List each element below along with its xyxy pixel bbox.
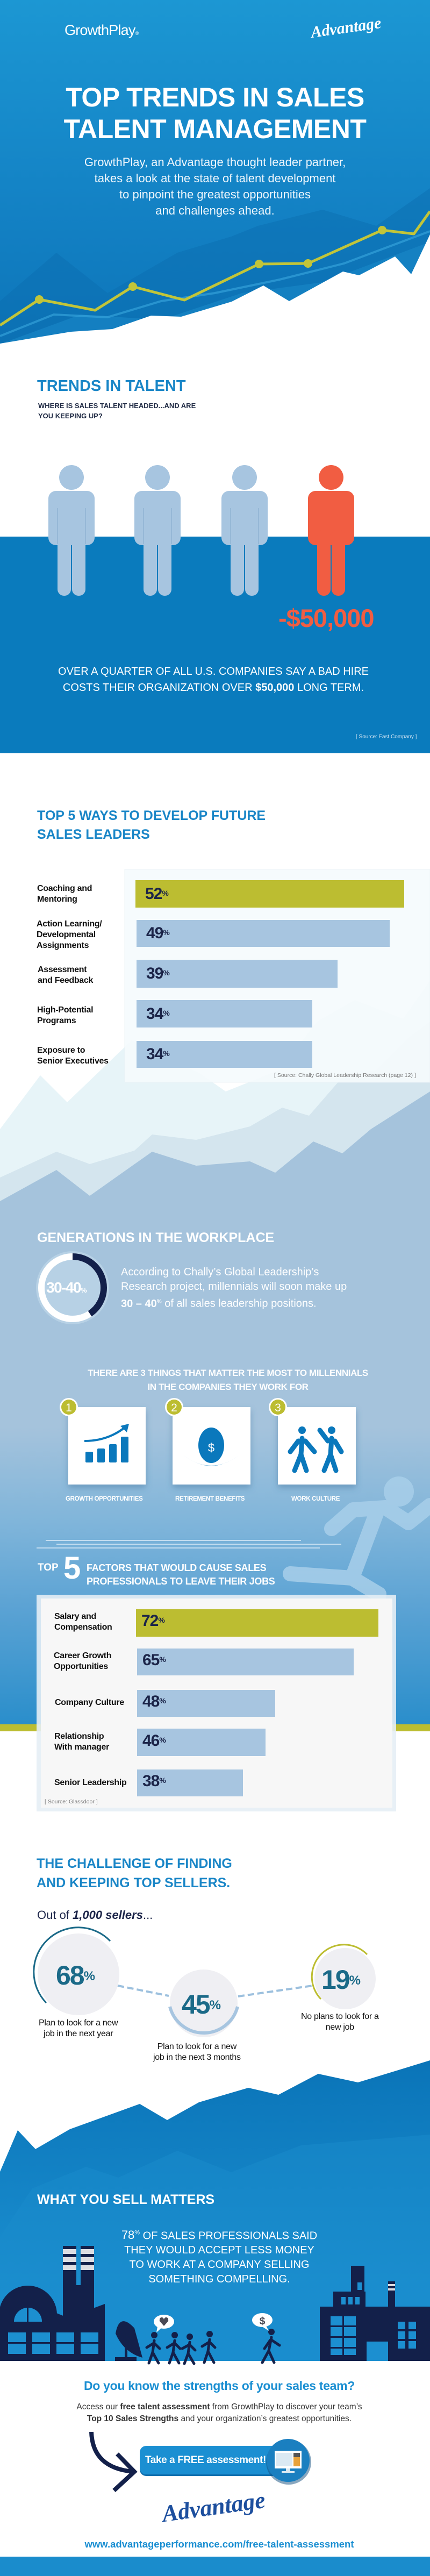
icon: two people bbox=[290, 1426, 341, 1471]
speed lines bbox=[37, 1540, 341, 1548]
captions: new job bbox=[326, 2023, 354, 2032]
walking people bbox=[147, 2329, 280, 2364]
heading: generations: GENERATIONS IN THE WORKPLACE bbox=[37, 1230, 274, 1245]
heading: top 5 ways: SALES LEADERS bbox=[37, 827, 150, 842]
hero white mountain edge bbox=[0, 234, 430, 376]
icon: runner bbox=[290, 1476, 430, 1645]
bar labels: develop: Exposure to bbox=[37, 1046, 85, 1055]
heading: 3 things: THERE ARE 3 THINGS THAT MATTER THE MOST TO MILLENNIALS bbox=[88, 1368, 368, 1378]
bar labels: develop: Action Learning/ bbox=[37, 919, 102, 929]
olive stripe bbox=[0, 1724, 430, 1731]
source: fast company: [ Source: Fast Company ] bbox=[356, 734, 417, 740]
logo: GrowthPlay: GrowthPlay® bbox=[64, 22, 138, 38]
box labels bbox=[66, 1496, 340, 1502]
trends blue band bbox=[0, 537, 430, 753]
cityscape bbox=[0, 2246, 430, 2361]
speech bubbles: $ bbox=[260, 2316, 266, 2327]
bar values: develop: 49% bbox=[146, 924, 170, 942]
bar labels: develop: Mentoring bbox=[37, 895, 77, 904]
heading: top 5 factors: 5 bbox=[63, 1551, 81, 1586]
bar labels: develop: Coaching and bbox=[37, 884, 92, 893]
box labels: WORK CULTURE bbox=[291, 1496, 340, 1502]
chart panel: develop leaders bbox=[125, 869, 430, 1082]
people icons bbox=[48, 465, 354, 596]
captions: Plan to look for a new bbox=[157, 2042, 236, 2051]
bar labels: develop: Senior Executives bbox=[37, 1057, 109, 1066]
source: glassdoor: [ Source: Glassdoor ] bbox=[45, 1799, 98, 1805]
cta text: Top 10 Sales Strengths and your organization’s greatest opportunities. bbox=[87, 2414, 352, 2423]
heading: 3 things bbox=[88, 1368, 368, 1392]
heading: what you sell matters: WHAT YOU SELL MATTERS bbox=[37, 2192, 214, 2207]
bottom blue mountains bbox=[0, 2060, 430, 2361]
bar labels: factors: Company Culture bbox=[55, 1698, 124, 1707]
bar values: factors: 46% bbox=[142, 1732, 166, 1750]
bar labels: develop: Developmental bbox=[37, 930, 96, 939]
icon: growth chart bbox=[84, 1424, 129, 1462]
number badges: 2 bbox=[171, 1402, 177, 1414]
heading: challenge: THE CHALLENGE OF FINDING bbox=[37, 1856, 232, 1871]
heading: top 5 factors: PROFESSIONALS TO LEAVE THEIR JOBS bbox=[87, 1576, 275, 1587]
captions: Plan to look for a new bbox=[39, 2018, 118, 2028]
box labels: GROWTH OPPORTUNITIES bbox=[66, 1496, 143, 1502]
captions: job in the next 3 months bbox=[153, 2053, 241, 2062]
logo: Advantage: Advantage bbox=[310, 14, 382, 41]
subtitle: and challenges ahead. bbox=[155, 204, 275, 217]
heading: challenge bbox=[37, 1856, 232, 1890]
captions: job in the next year bbox=[44, 2029, 113, 2038]
subtitle: to pinpoint the greatest opportunities bbox=[119, 188, 311, 201]
bar labels: factors: Career Growth bbox=[54, 1651, 111, 1660]
icon: nest egg bbox=[184, 1428, 239, 1466]
bar labels: develop: Assessment bbox=[38, 965, 87, 974]
text: bad hire stat: OVER A QUARTER OF ALL U.S. COMPANIES SAY A BAD HIRE bbox=[58, 666, 369, 677]
bar values: factors: 65% bbox=[142, 1651, 166, 1669]
bar labels: factors: With manager bbox=[54, 1743, 109, 1752]
chart panel: leave factors bbox=[37, 1595, 396, 1811]
bar labels: develop: and Feedback bbox=[38, 976, 93, 985]
bar labels: develop: Programs bbox=[37, 1016, 76, 1025]
hero background bbox=[0, 0, 430, 355]
stat 68%: 68% bbox=[56, 1960, 95, 1990]
cta text: Access our free talent assessment from GrowthPlay to discover your team’s bbox=[76, 2402, 362, 2411]
text: 78% bbox=[121, 2228, 317, 2285]
bar values: factors: 72% bbox=[141, 1612, 165, 1630]
text: out of 1,000: Out of 1,000 sellers... bbox=[37, 1908, 153, 1922]
bar values: factors: 38% bbox=[142, 1772, 166, 1790]
text: 78%: SOMETHING COMPELLING. bbox=[148, 2273, 290, 2285]
heading: top 5 factors: FACTORS THAT WOULD CAUSE SALES bbox=[87, 1562, 266, 1573]
bar values: develop bbox=[145, 885, 170, 1063]
cta text bbox=[76, 2402, 362, 2423]
subheading bbox=[38, 402, 196, 420]
hero chart line bbox=[0, 211, 430, 325]
millennials boxes bbox=[60, 1398, 356, 1485]
bar labels: develop: Assignments bbox=[37, 941, 89, 950]
title bbox=[64, 82, 367, 144]
bar values: develop: 34% bbox=[146, 1005, 170, 1023]
logo: Advantage footer: Advantage bbox=[161, 2487, 267, 2527]
subtitle bbox=[84, 155, 346, 217]
text: bad hire stat: COSTS THEIR ORGANIZATION OVER $50,000 LONG TERM. bbox=[63, 682, 364, 694]
light mountains background bbox=[0, 981, 430, 1724]
text: 78%: 78% OF SALES PROFESSIONALS SAID bbox=[121, 2228, 317, 2242]
bar labels: factors: Opportunities bbox=[54, 1662, 108, 1671]
cta heading: Do you know the strengths of your sales team? bbox=[84, 2379, 355, 2393]
captions bbox=[39, 2012, 379, 2062]
heading: top 5 ways bbox=[37, 808, 266, 842]
bar labels: factors: Relationship bbox=[54, 1732, 104, 1741]
number badges: 3 bbox=[275, 1402, 281, 1414]
bar values: factors bbox=[141, 1612, 166, 1790]
title: TOP TRENDS IN SALES bbox=[66, 82, 364, 112]
subheading: WHERE IS SALES TALENT HEADED...AND ARE bbox=[38, 402, 196, 410]
bar labels: factors: Senior Leadership bbox=[54, 1778, 127, 1787]
subtitle: GrowthPlay, an Advantage thought leader partner, bbox=[84, 155, 346, 169]
text: millennials leadership bbox=[121, 1266, 347, 1310]
donut label: 30-40% bbox=[46, 1279, 87, 1296]
source: chally: [ Source: Chally Global Leadership Research (page 12) ] bbox=[274, 1072, 416, 1079]
text: millennials leadership: 30 – 40% of all sales leadership positions. bbox=[121, 1298, 317, 1310]
captions: No plans to look for a bbox=[301, 2012, 379, 2021]
footer band bbox=[0, 2557, 430, 2576]
bar labels: develop bbox=[37, 884, 109, 1066]
bar labels: factors bbox=[54, 1612, 127, 1787]
button text: Take a FREE assessment! bbox=[145, 2454, 266, 2466]
stat 19%: 19% bbox=[321, 1965, 361, 1995]
arrow bbox=[91, 2432, 134, 2491]
seller circles bbox=[34, 1928, 376, 2037]
speech bubbles bbox=[154, 2313, 273, 2332]
bar labels: factors: Compensation bbox=[54, 1623, 112, 1632]
bar values: develop: 39% bbox=[146, 965, 170, 982]
bar values: factors: 48% bbox=[142, 1693, 166, 1710]
bar labels: factors: Salary and bbox=[54, 1612, 96, 1621]
heading: 3 things: IN THE COMPANIES THEY WORK FOR bbox=[147, 1382, 309, 1392]
text: bad hire stat bbox=[58, 666, 369, 694]
heading: challenge: AND KEEPING TOP SELLERS. bbox=[37, 1875, 230, 1890]
stat: -$50,000: -$50,000 bbox=[278, 604, 374, 632]
text: millennials leadership: Research project, millennials will soon make up bbox=[121, 1281, 347, 1293]
number badges bbox=[60, 1398, 287, 1416]
donut chart bbox=[36, 1251, 109, 1324]
subtitle: takes a look at the state of talent development bbox=[95, 172, 335, 185]
bar values: develop: 34% bbox=[146, 1045, 170, 1063]
heading: top 5 ways: TOP 5 WAYS TO DEVELOP FUTURE bbox=[37, 808, 266, 823]
bar labels: develop: High-Potential bbox=[37, 1005, 93, 1015]
icon: nest egg: $ bbox=[208, 1441, 214, 1454]
box labels: RETIREMENT BENEFITS bbox=[175, 1496, 245, 1502]
text: 78%: TO WORK AT A COMPANY SELLING bbox=[130, 2259, 309, 2271]
title: TALENT MANAGEMENT bbox=[64, 114, 366, 144]
subheading: YOU KEEPING UP? bbox=[38, 412, 103, 420]
heading: trends in talent: TRENDS IN TALENT bbox=[37, 377, 186, 395]
text: 78%: THEY WOULD ACCEPT LESS MONEY bbox=[124, 2244, 314, 2256]
heading: top 5 factors bbox=[38, 1551, 275, 1587]
number badges: 1 bbox=[66, 1402, 72, 1414]
text: millennials leadership: According to Chally’s Global Leadership’s bbox=[121, 1266, 319, 1278]
cta button bbox=[140, 2439, 311, 2485]
stat 45%: 45% bbox=[182, 1989, 221, 2020]
heading: top 5 factors: TOP bbox=[38, 1562, 59, 1573]
url: www.advantageperformance.com/free-talent-assessment bbox=[84, 2538, 354, 2550]
bar values: develop: 52% bbox=[145, 885, 169, 903]
